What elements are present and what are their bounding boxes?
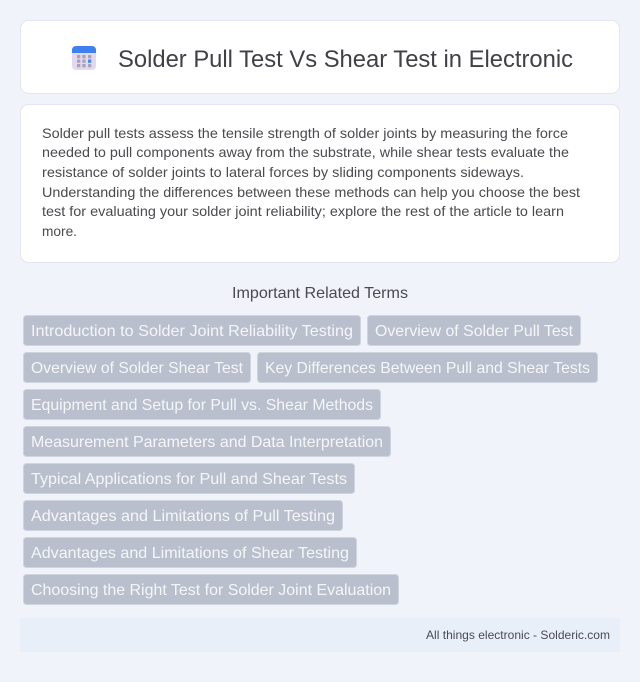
tag: shear testing pros and cons <box>24 538 356 568</box>
tag: choosing the right test <box>24 574 398 604</box>
tag: pull testing pros and cons <box>24 500 342 530</box>
tag: key differences <box>258 352 598 382</box>
tag: pull testing pros and cons: Advantages and Limitations of Pull Testing <box>31 508 335 525</box>
text block: summary paragraph: test for evaluating your solder joint reliability; explore the rest of the article to learn <box>42 203 564 219</box>
tag: choosing the right test: Choosing the Right Test for Solder Joint Evaluation <box>31 582 391 599</box>
tag: measurement parameters <box>24 426 390 456</box>
tag list: related terms <box>24 316 598 604</box>
tag: typical applications: Typical Applications for Pull and Shear Tests <box>31 471 347 488</box>
tag: typical applications <box>24 464 354 494</box>
footer <box>20 618 620 652</box>
tag: key differences: Key Differences Between Pull and Shear Tests <box>265 360 590 377</box>
tag: introduction <box>24 316 360 346</box>
tag: equipment and setup <box>24 390 380 420</box>
tag: shear testing pros and cons: Advantages and Limitations of Shear Testing <box>31 545 349 562</box>
text block: summary paragraph: Solder pull tests assess the tensile strength of solder joints by measuring the force <box>42 125 568 141</box>
tag: introduction: Introduction to Solder Joint Reliability Testing <box>31 323 353 340</box>
tag: overview of shear test <box>24 352 250 382</box>
panel: title card <box>20 20 620 94</box>
tag: overview of pull test: Overview of Solder Pull Test <box>375 323 574 340</box>
heading: related terms: Important Related Terms <box>232 285 408 302</box>
text block: summary paragraph: needed to pull components away from the substrate, while shear tests evaluate the <box>42 144 569 160</box>
text block: summary paragraph: Understanding the differences between these methods can help you choose the best <box>42 184 580 200</box>
icon: calendar <box>72 46 96 70</box>
text block: summary paragraph <box>42 125 580 239</box>
title: Solder Pull Test Vs Shear Test in Electronic <box>118 46 573 73</box>
tag: overview of pull test <box>368 316 580 346</box>
footer: All things electronic - Solderic.com <box>426 628 610 642</box>
panel: summary <box>20 104 620 262</box>
tag: overview of shear test: Overview of Solder Shear Test <box>31 360 244 377</box>
tag: measurement parameters: Measurement Parameters and Data Interpretation <box>31 434 383 451</box>
tag: equipment and setup: Equipment and Setup for Pull vs. Shear Methods <box>31 397 373 414</box>
text block: summary paragraph: resistance of solder joints to lateral forces by sliding components sideways. <box>42 164 524 180</box>
text block: summary paragraph: more. <box>42 223 77 239</box>
